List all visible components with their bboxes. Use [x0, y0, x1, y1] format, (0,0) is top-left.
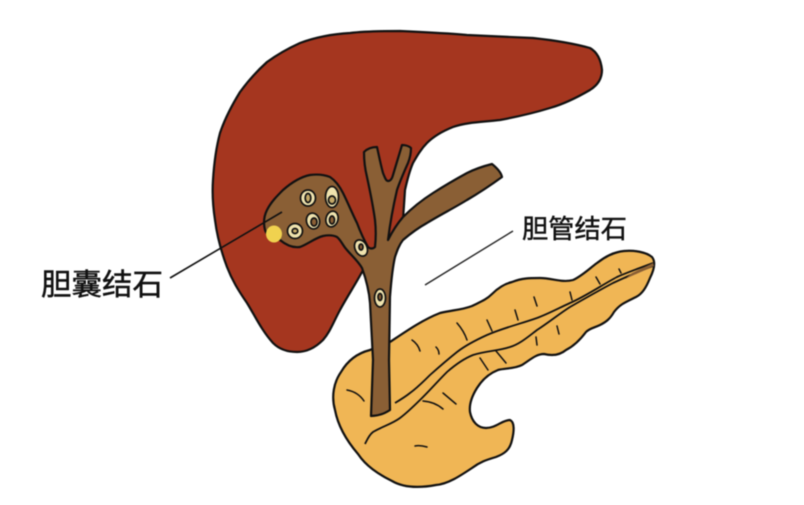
- duct tip: [625, 263, 654, 279]
- liver: [213, 31, 602, 352]
- pancreas lobule marks: [347, 269, 621, 447]
- pointer line: gallbladder stones: [170, 212, 282, 278]
- pancreas: [333, 251, 654, 487]
- label: bile duct stones: 胆管结石: [522, 214, 627, 244]
- gallstones: [266, 186, 386, 307]
- yellow gallstone: [266, 226, 282, 242]
- pancreatic duct: [395, 263, 653, 403]
- pointer line: bile duct stones: [425, 231, 513, 285]
- bile duct and gallbladder: [264, 145, 502, 416]
- stone cluster: [288, 186, 386, 307]
- label: gallbladder stones: 胆囊结石: [41, 269, 163, 302]
